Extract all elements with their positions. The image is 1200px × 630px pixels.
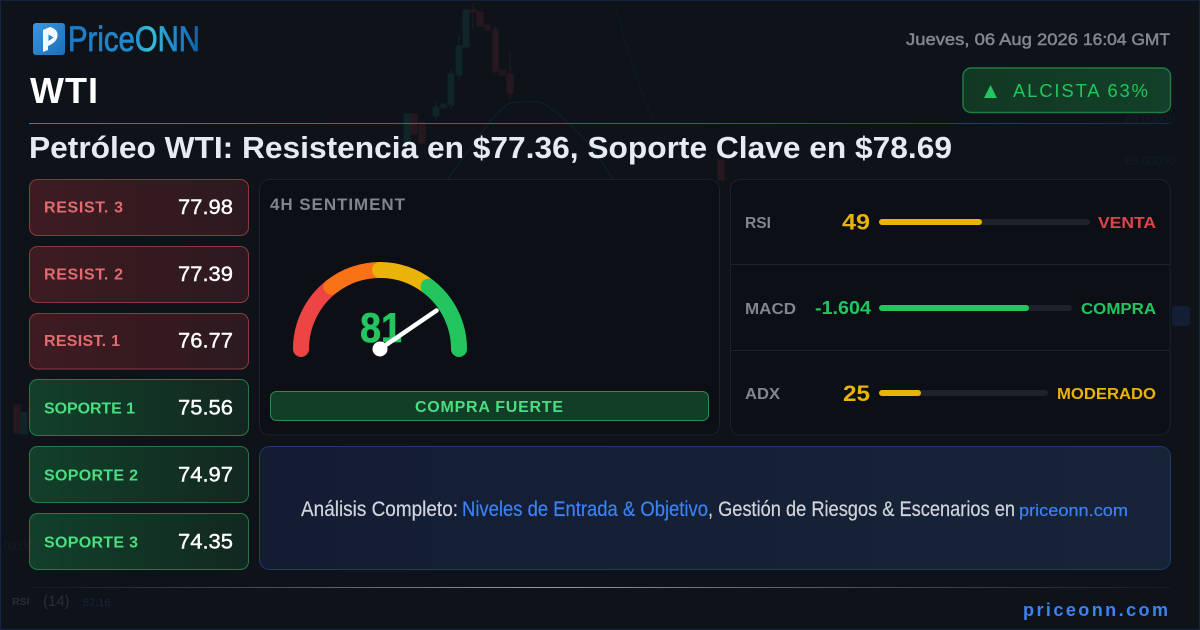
sentiment heading: 4H SENTIMENT xyxy=(270,195,406,214)
level: support 2 xyxy=(30,446,248,502)
level: support 2: 74.97 xyxy=(178,464,233,486)
level: support 3: SOPORTE 3 xyxy=(44,534,138,552)
level: resist 1 xyxy=(30,314,248,369)
faint RSI chart label: RSI xyxy=(12,596,30,608)
indicator: MACD: MACD xyxy=(745,301,796,318)
gauge needle xyxy=(372,310,436,356)
call to action text: , Gestión de Riesgos & Escenarios en xyxy=(708,498,1015,521)
indicator: RSI: 49 xyxy=(842,210,870,234)
panel: sentiment xyxy=(260,180,720,435)
indicator: RSI xyxy=(745,210,1156,234)
level: resist 1: 76.77 xyxy=(178,330,233,352)
indicator: ADX xyxy=(745,381,1156,406)
level: support 3: 74.35 xyxy=(178,530,233,554)
gauge xyxy=(301,270,459,356)
call to action text xyxy=(301,498,1128,521)
indicator: MACD: -1.604 xyxy=(815,297,872,318)
background chart: 90.00000 xyxy=(1125,69,1175,83)
sentiment verdict: COMPRA FUERTE xyxy=(415,399,563,416)
gauge value: 81 xyxy=(360,304,402,351)
trend badge xyxy=(963,68,1170,112)
header divider xyxy=(29,123,1170,124)
faint RSI chart label xyxy=(12,593,111,610)
indicator: MACD xyxy=(745,297,1156,318)
headline: Petróleo WTI: Resistencia en $77.36, Soporte Clave en $78.69 xyxy=(29,130,952,165)
call to action text: Análisis Completo: xyxy=(301,498,458,521)
level: support 3 xyxy=(30,514,248,570)
panel: levels xyxy=(30,180,248,570)
level: resist 2 xyxy=(30,246,248,302)
call to action text: Niveles de Entrada & Objetivo xyxy=(462,498,708,521)
level: resist 3 xyxy=(30,180,248,236)
faint RSI chart label: (14) xyxy=(43,593,70,610)
call to action text: priceonn.com xyxy=(1019,501,1128,520)
footer divider xyxy=(30,587,1170,588)
symbol: WTI xyxy=(30,70,98,111)
indicator: ADX: 25 xyxy=(843,381,870,406)
background chart: 00:00 xyxy=(3,539,33,553)
indicator: RSI: RSI xyxy=(745,215,771,232)
level: resist 3: 77.98 xyxy=(178,196,233,219)
logo xyxy=(33,20,200,59)
icon: up triangle xyxy=(984,85,997,98)
sentiment verdict xyxy=(270,392,708,420)
background chart: 86.00000 xyxy=(1125,154,1175,168)
level: support 1: 75.56 xyxy=(178,396,233,420)
level: support 2: SOPORTE 2 xyxy=(44,468,138,484)
date and time: 16:04 GMT xyxy=(1083,30,1170,49)
panel: call to action xyxy=(260,446,1170,570)
badge label: ALCISTA 63% xyxy=(1013,80,1148,101)
date and time xyxy=(906,30,1170,49)
background chart: 88.00000 xyxy=(1125,112,1175,126)
panel: indicators xyxy=(730,180,1170,435)
level: resist 3: RESIST. 3 xyxy=(44,200,123,216)
indicator: MACD: COMPRA xyxy=(1081,301,1156,318)
indicator: ADX: ADX xyxy=(745,386,780,403)
level: resist 2: 77.39 xyxy=(178,263,233,286)
indicator: RSI: VENTA xyxy=(1098,215,1156,232)
indicator: ADX: MODERADO xyxy=(1057,386,1156,403)
level: support 1: SOPORTE 1 xyxy=(44,400,135,418)
logo wordmark: PriceONN xyxy=(68,20,200,59)
level: resist 1: RESIST. 1 xyxy=(44,333,120,350)
icon: logo mark xyxy=(33,23,65,55)
date and time: Jueves, 06 Aug 2026 xyxy=(906,30,1078,49)
footer url: priceonn.com xyxy=(1023,600,1168,620)
level: resist 2: RESIST. 2 xyxy=(44,266,123,284)
faint RSI chart label: 52.16 xyxy=(83,597,111,609)
level: support 1 xyxy=(30,380,248,436)
